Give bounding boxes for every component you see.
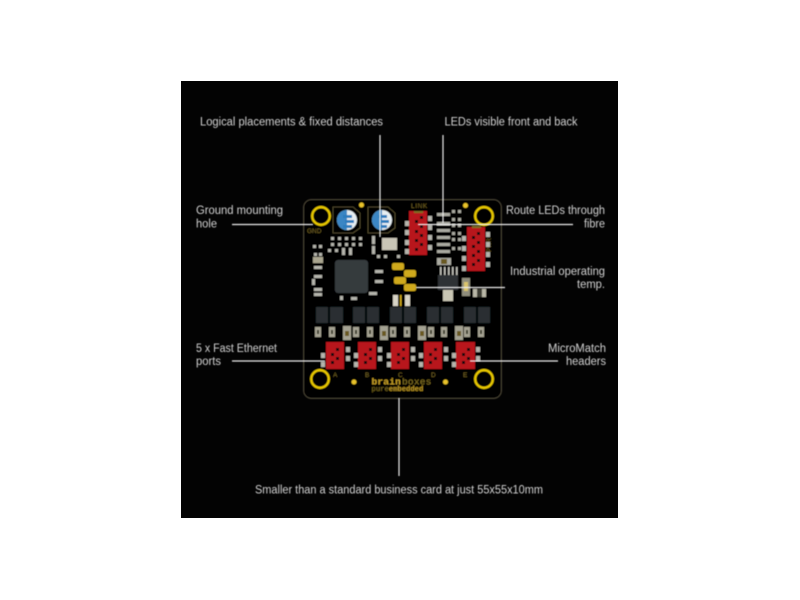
main chip — [335, 260, 368, 293]
silkscreen labels: GND — [307, 228, 322, 235]
port header B — [354, 342, 382, 369]
pads below gold — [393, 295, 410, 306]
row of small components — [315, 326, 484, 340]
gold pads — [392, 263, 416, 291]
port header C — [387, 342, 415, 369]
silkscreen labels: B — [365, 372, 369, 379]
label: ground mounting: Ground mounting — [196, 205, 283, 217]
silkscreen labels: D — [431, 372, 436, 379]
label: headers: headers — [566, 356, 606, 368]
ethernet magnetics — [316, 307, 490, 323]
callout lines — [232, 135, 573, 476]
port header A — [321, 342, 350, 369]
label: hole: hole — [196, 218, 217, 230]
silkscreen labels: C — [398, 372, 403, 379]
mounting holes — [311, 207, 493, 388]
callout labels — [196, 116, 606, 496]
label: route LEDs: Route LEDs through — [506, 205, 605, 217]
board outline — [304, 200, 502, 398]
label: temp: temp. — [577, 279, 605, 291]
silkscreen labels: A — [333, 372, 338, 379]
LED column — [437, 210, 461, 265]
logo: pure embedded: pureembedded — [372, 386, 423, 394]
label: industrial operating: Industrial operating — [510, 266, 605, 278]
label: size: Smaller than a standard business card at just 55x55x10mm — [255, 484, 543, 496]
capacitors — [333, 207, 395, 233]
PWR header — [462, 226, 490, 271]
port header D — [419, 342, 448, 369]
label: fibre: fibre — [584, 218, 605, 230]
label: LEDs visible: LEDs visible front and back — [444, 116, 578, 128]
voltage regulator — [438, 267, 486, 301]
silkscreen labels: E — [463, 372, 468, 379]
label: micromatch: MicroMatch — [548, 343, 606, 355]
port header E — [452, 342, 480, 369]
circuit board — [304, 200, 502, 398]
silkscreen labels — [307, 203, 493, 379]
label: ports: ports — [196, 356, 221, 368]
logo: brainboxes: brainboxes — [372, 376, 432, 388]
label: fast ethernet: 5 x Fast Ethernet — [196, 343, 278, 355]
crystal — [382, 238, 397, 250]
small SMD parts upper left — [312, 236, 400, 300]
silkscreen labels: PWR — [487, 237, 493, 252]
silkscreen labels: LINK — [411, 203, 428, 210]
gold vias — [352, 202, 468, 384]
LINK header — [405, 211, 432, 255]
label: logical placements: Logical placements & fixed distances — [200, 116, 383, 128]
panel: black background — [181, 81, 618, 518]
